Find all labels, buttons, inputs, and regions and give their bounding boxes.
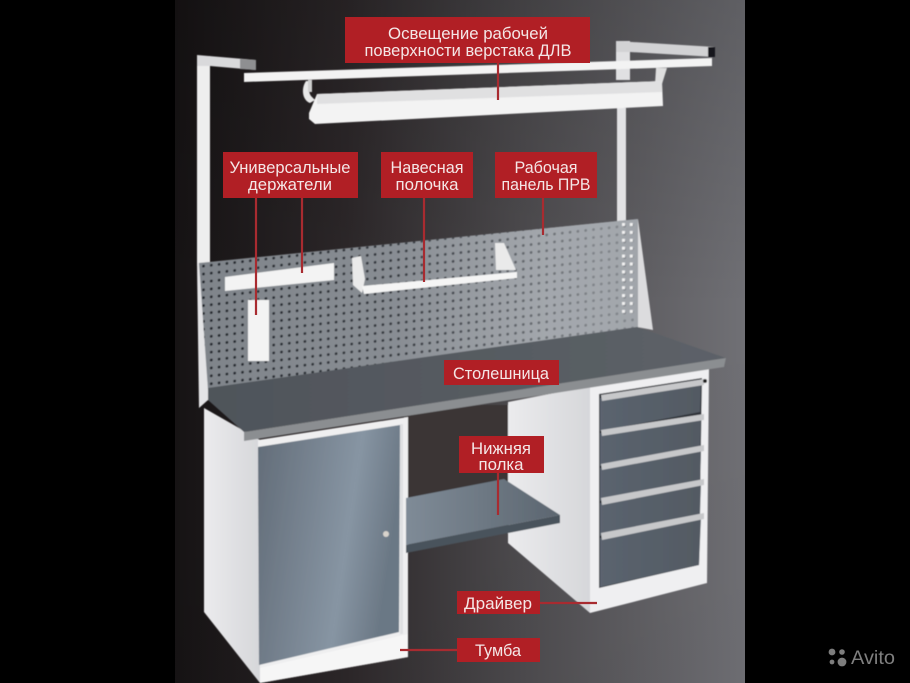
lamp rail — [244, 58, 712, 82]
left cabinet — [204, 408, 408, 683]
label: pedestal: Тумба — [475, 641, 522, 660]
label: lighting: Освещение рабочей — [388, 24, 548, 43]
label: tabletop — [444, 360, 559, 385]
perforated panel — [197, 219, 653, 408]
label: lighting: поверхности верстака ДЛВ — [364, 41, 572, 60]
label: lower shelf — [459, 436, 544, 474]
lamp fixture — [303, 68, 667, 124]
drawers — [600, 382, 701, 587]
label: universal holders: держатели — [248, 175, 332, 194]
label: work panel: панель ПРВ — [502, 175, 590, 194]
drawer handles — [601, 379, 704, 540]
label: tabletop: Столешница — [453, 364, 550, 383]
lower shelf — [406, 479, 560, 553]
label: universal holders — [223, 152, 358, 198]
right upright post — [616, 41, 715, 226]
label: work panel: Рабочая — [514, 158, 578, 177]
workbench illustration — [197, 41, 726, 683]
right cabinet — [508, 368, 709, 613]
label: lower shelf: Нижняя — [471, 439, 531, 458]
tabletop — [208, 327, 726, 441]
label: driver: Драйвер — [464, 594, 532, 613]
leader lines — [256, 62, 597, 650]
label: driver — [457, 591, 540, 614]
label: hanging shelf: Навесная — [390, 158, 464, 177]
label: hanging shelf — [381, 152, 473, 198]
label: lighting — [345, 17, 590, 63]
rear dark gap under tabletop — [404, 405, 510, 500]
label: hanging shelf: полочка — [396, 175, 459, 194]
label: lower shelf: полка — [478, 455, 524, 474]
label: work panel — [495, 152, 597, 198]
label: universal holders: Универсальные — [230, 158, 350, 177]
Avito watermark: Avito — [851, 648, 895, 669]
Avito watermark — [829, 648, 895, 669]
left upright post — [197, 55, 256, 266]
hanging shelf — [352, 243, 517, 294]
universal holders — [225, 263, 334, 361]
label: pedestal — [457, 638, 540, 662]
